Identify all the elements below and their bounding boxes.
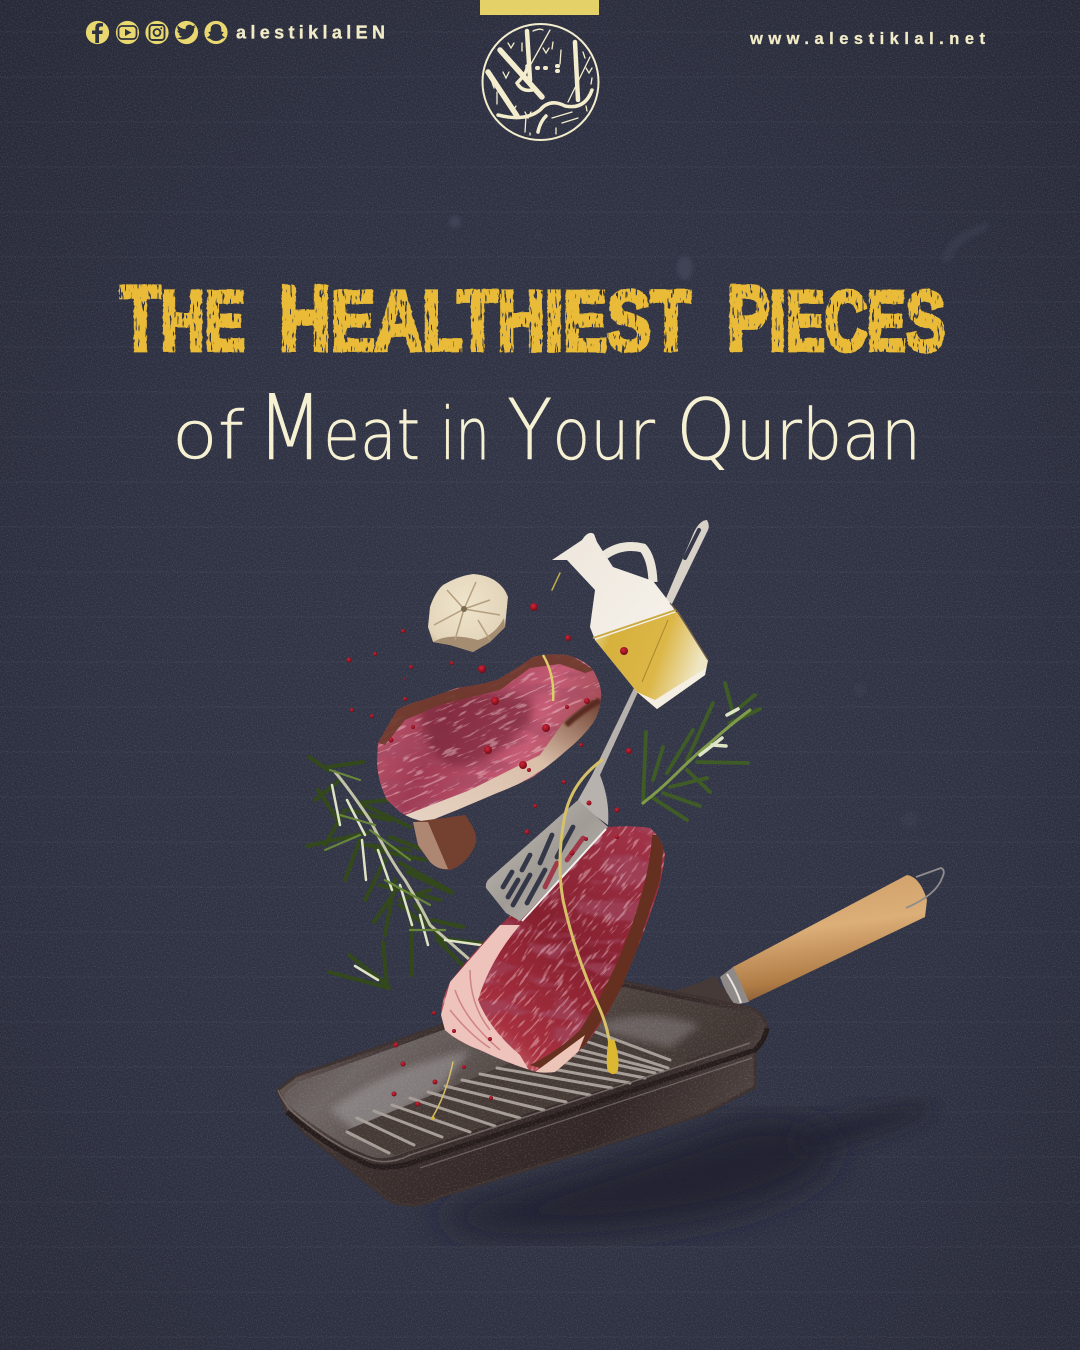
title: the healthiest pieces (120, 268, 945, 370)
social media row (86, 21, 385, 44)
pan handle (675, 868, 944, 1005)
rosemary sprig: right (643, 683, 760, 820)
lower steak (441, 826, 665, 1073)
grill ridges (347, 1030, 670, 1153)
upper steak (377, 654, 602, 870)
pan interior (285, 987, 758, 1158)
pan rim highlight (287, 1028, 767, 1167)
top accent bar (480, 0, 599, 15)
oil stream (431, 573, 618, 1120)
subtitle: of meat in your qurban: in (440, 392, 490, 476)
peppercorns (346, 603, 632, 1106)
icon: facebook (86, 21, 109, 44)
title: the healthiest pieces: HEALTHIEST (279, 268, 691, 370)
pan shadow (430, 1102, 931, 1234)
garlic bulb (428, 574, 508, 652)
title: the healthiest pieces: THE (120, 268, 245, 370)
oil bottle (552, 533, 708, 709)
website address: www.alestiklal.net (749, 30, 986, 48)
spatula slots (503, 827, 573, 905)
handle text: alestiklalEN (236, 22, 385, 42)
subtitle: of meat in your qurban (172, 376, 921, 481)
subtitle: of meat in your qurban: Qurban (676, 381, 921, 479)
logo: calligraphic seal (482, 24, 598, 140)
frying pan (270, 868, 944, 1215)
icon: twitter (175, 21, 198, 44)
food illustration (270, 520, 944, 1234)
icon: youtube (116, 21, 139, 44)
rosemary sprig: left (307, 757, 519, 990)
subtitle: of meat in your qurban: Your (507, 381, 655, 479)
icon: instagram (145, 21, 169, 44)
subtitle: of meat in your qurban: Meat (257, 376, 420, 481)
subtitle: of meat in your qurban: of (172, 397, 245, 474)
steak underside (413, 815, 476, 870)
icon: snapchat (204, 21, 228, 44)
title: the healthiest pieces: PIECES (727, 268, 945, 370)
spatula (486, 520, 709, 921)
